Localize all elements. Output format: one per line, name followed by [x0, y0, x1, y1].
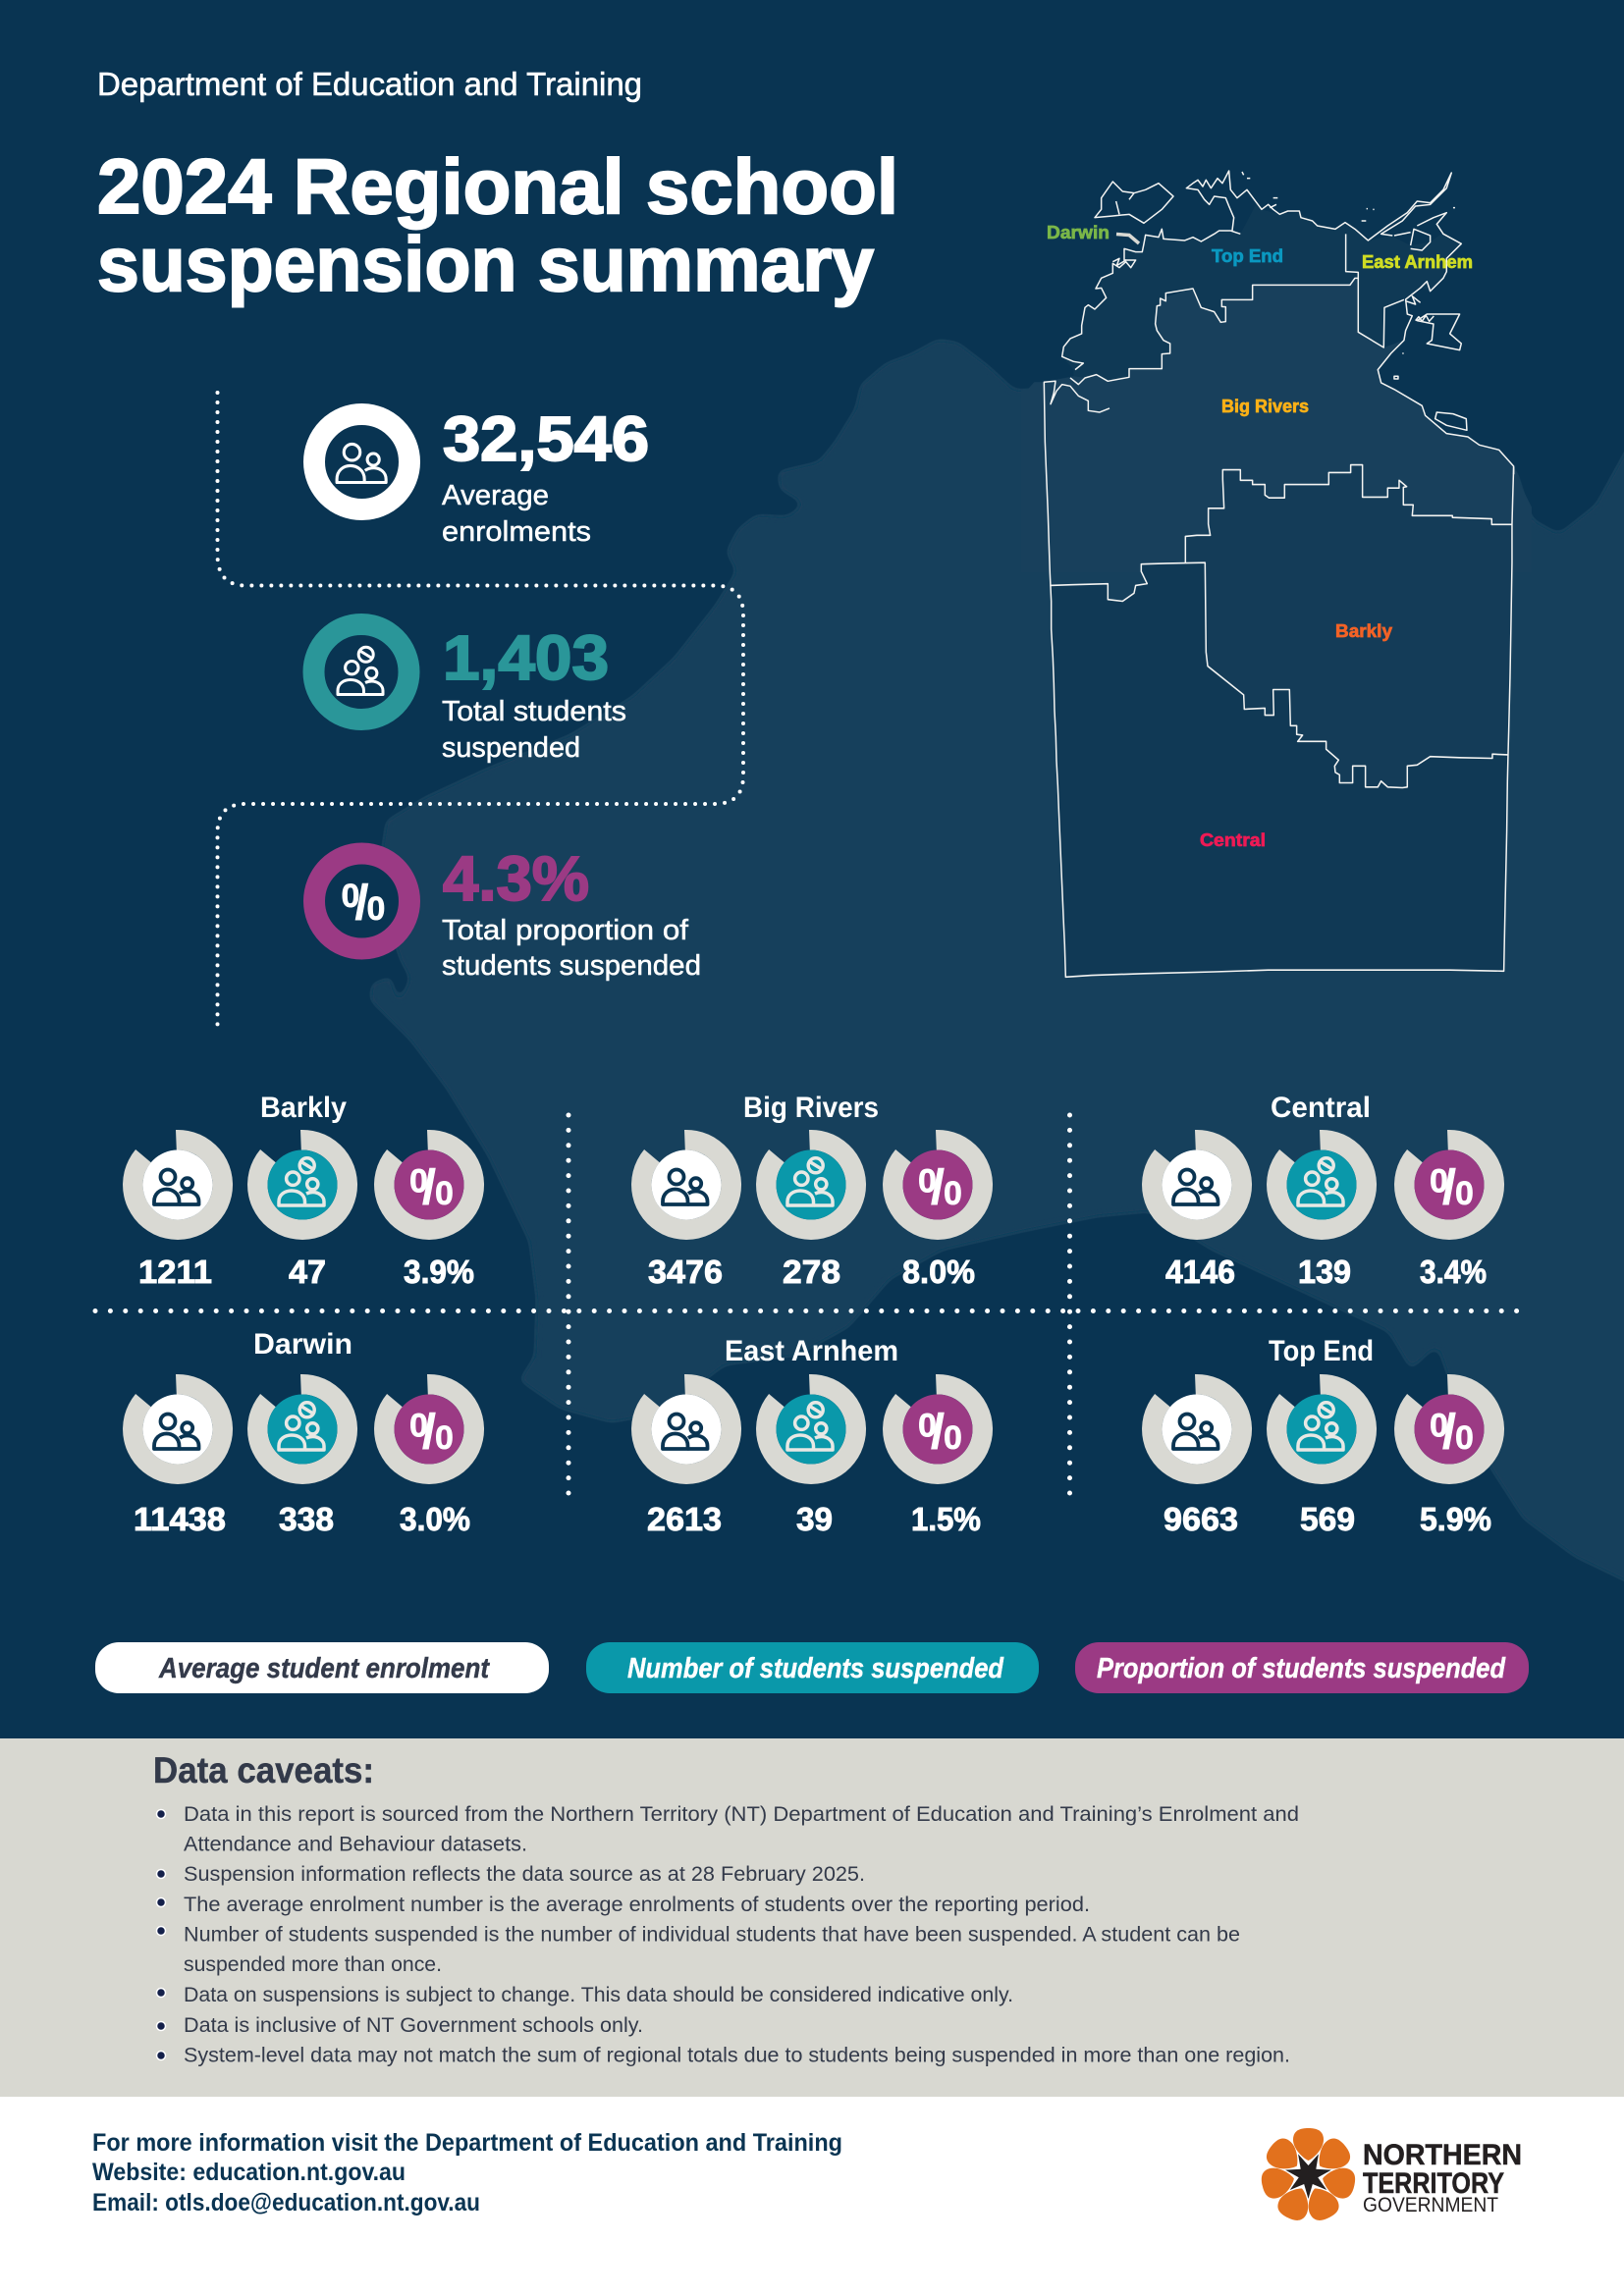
caveat text: Suspension information reflects the data source as at 28 February 2025. — [184, 1863, 865, 1886]
caveat text: The average enrolment number is the average enrolments of students over the reporting period. — [184, 1894, 1090, 1916]
caveat text: suspended more than once. — [184, 1953, 442, 1976]
donut: proportion: 0 — [409, 1162, 428, 1200]
value: 1,403 — [443, 622, 609, 693]
region title: Darwin — [253, 1328, 352, 1361]
donut: proportion: / — [931, 1160, 945, 1215]
donut: enrolment — [123, 1130, 233, 1240]
icon: ring with people — [314, 414, 409, 509]
KPI: total proportion suspended: students suspended — [442, 950, 701, 982]
label: Total proportion of — [442, 915, 689, 946]
panel: Top End — [1142, 1335, 1504, 1537]
donut: proportion: / — [422, 1160, 436, 1215]
donut: proportion: 0 — [409, 1408, 428, 1445]
icon: ring with suspended people — [314, 624, 408, 720]
map region: Central — [1050, 562, 1508, 977]
KPI: average enrolments: enrolments — [442, 516, 591, 548]
donut: proportion — [1394, 1374, 1504, 1484]
panel: Top End: 569 — [1300, 1501, 1355, 1537]
panel: Barkly: 47 — [289, 1254, 326, 1290]
donut: proportion — [1394, 1130, 1504, 1240]
caveat text: System-level data may not match the sum of regional totals due to students being suspended in more than one region. — [184, 2044, 1290, 2067]
donut: suspended — [1267, 1374, 1377, 1484]
map label: Top End: Top End — [1212, 246, 1283, 266]
caveat text: Attendance and Behaviour datasets. — [184, 1834, 527, 1855]
donut: enrolment — [123, 1374, 233, 1484]
donut: proportion: 0 — [1455, 1175, 1474, 1212]
donut: suspended — [756, 1374, 866, 1484]
donut: suspended — [247, 1130, 357, 1240]
icon: ring with percent: / — [355, 876, 369, 931]
logo wordmark: GOVERNMENT — [1363, 2194, 1498, 2216]
donut: proportion: 0 — [918, 1408, 937, 1445]
region title: Barkly — [260, 1092, 347, 1124]
map outlines: northern coast and borders — [1044, 171, 1514, 474]
map label: East Arnhem: East Arnhem — [1362, 252, 1473, 272]
panel: Big Rivers: 8.0% — [902, 1254, 975, 1290]
footer contact text: Website: education.nt.gov.au — [92, 2159, 406, 2186]
donut: enrolment — [631, 1374, 741, 1484]
legend pill: proportion: Proportion of students suspended — [1097, 1653, 1506, 1684]
map region: Top End — [1062, 203, 1358, 381]
panel: Central: 3.4% — [1420, 1254, 1487, 1290]
icon: desert rose flower — [1259, 2128, 1358, 2224]
panel: Central: 139 — [1298, 1254, 1351, 1290]
donut: proportion: 0 — [918, 1162, 937, 1200]
region title: Top End — [1269, 1335, 1374, 1367]
region title: Big Rivers — [743, 1092, 879, 1124]
map label: Central: Central — [1200, 830, 1266, 850]
caveats heading: Data caveats: — [153, 1750, 374, 1790]
values: 11438 — [134, 1501, 226, 1537]
donut: proportion: 0 — [1430, 1408, 1448, 1445]
footer contact text — [92, 2129, 842, 2216]
logo wordmark — [1363, 2139, 1522, 2216]
donut: enrolment — [631, 1130, 741, 1240]
KPI: total students suspended: suspended — [442, 732, 580, 764]
donut: proportion: 0 — [1455, 1419, 1474, 1457]
donut: suspended — [247, 1374, 357, 1484]
donut: suspended — [1267, 1130, 1377, 1240]
panel: Big Rivers: 278 — [783, 1254, 840, 1290]
value: 32,546 — [443, 403, 649, 474]
donut: proportion — [883, 1130, 993, 1240]
legend pill: suspended — [586, 1642, 1039, 1693]
donut: proportion — [883, 1374, 993, 1484]
donut: proportion: 0 — [435, 1419, 454, 1457]
title: 2024 Regional school — [97, 142, 898, 230]
KPI: total students suspended — [314, 622, 626, 764]
map region: Barkly — [1185, 465, 1512, 787]
panel: Darwin: 3.0% — [400, 1501, 470, 1537]
region title: Central — [1271, 1092, 1371, 1124]
donut: proportion — [374, 1374, 484, 1484]
donut: proportion — [374, 1130, 484, 1240]
icon: ring with percent: 0 — [342, 878, 359, 915]
icon: ring with percent: 0 — [367, 890, 385, 928]
panel: East Arnhem — [631, 1335, 993, 1537]
background: navy page — [0, 0, 1624, 1739]
legend pill: enrolment: Average student enrolment — [158, 1653, 490, 1684]
donut: proportion: 0 — [435, 1175, 454, 1212]
map label: Big Rivers: Big Rivers — [1221, 397, 1309, 416]
map label: Darwin: Darwin — [1047, 223, 1110, 242]
donut: proportion: 0 — [944, 1419, 962, 1457]
donut: proportion: / — [931, 1404, 945, 1459]
legend — [95, 1642, 1529, 1693]
values: 1211 — [138, 1254, 212, 1290]
panel: Central — [1142, 1092, 1504, 1290]
map: Northern Territory regions — [1044, 171, 1514, 977]
panel: Darwin — [123, 1328, 484, 1537]
logo wordmark: TERRITORY — [1363, 2167, 1504, 2200]
title — [97, 142, 898, 307]
map outlines: inland borders — [1045, 442, 1514, 977]
logo: Northern Territory Government — [1259, 2128, 1522, 2224]
caveat text: Data in this report is sourced from the Northern Territory (NT) Department of Education and Training’s Enrolment and — [184, 1803, 1299, 1826]
donut: proportion: / — [1442, 1160, 1456, 1215]
value: 4.3% — [443, 843, 589, 914]
legend pill: suspended: Number of students suspended — [627, 1653, 1004, 1684]
donut: enrolment — [1142, 1130, 1252, 1240]
caveat text: Data is inclusive of NT Government schools only. — [184, 2014, 643, 2037]
department name: Department of Education and Training — [97, 66, 642, 102]
KPI: average enrolments — [314, 403, 649, 548]
footer contact text: For more information visit the Department of Education and Training — [92, 2129, 842, 2157]
map region: East Arnhem — [1345, 223, 1461, 347]
donut: enrolment — [1142, 1374, 1252, 1484]
values: 2613 — [647, 1501, 722, 1537]
donut: proportion: / — [422, 1404, 436, 1459]
panel: East Arnhem: 1.5% — [911, 1501, 981, 1537]
icon: ring with percent — [314, 854, 409, 948]
legend pill: proportion — [1075, 1642, 1529, 1693]
panel: Darwin: 338 — [279, 1501, 334, 1537]
grid dividers — [95, 1115, 1532, 1508]
legend pill: enrolment — [95, 1642, 549, 1693]
values: 4146 — [1165, 1254, 1235, 1290]
footer contact text: Email: otls.doe@education.nt.gov.au — [92, 2189, 480, 2216]
dotted connector — [218, 393, 743, 1025]
caveat text: Data on suspensions is subject to change. This data should be considered indicative only. — [184, 1984, 1013, 2006]
donut: suspended — [756, 1130, 866, 1240]
background: Australia silhouette — [369, 262, 1624, 1615]
donut: proportion: / — [1442, 1404, 1456, 1459]
caveat bullets — [157, 1810, 165, 2059]
values: 9663 — [1164, 1501, 1238, 1537]
map label pointer: Darwin — [1116, 234, 1139, 243]
region title: East Arnhem — [725, 1335, 898, 1367]
panel: Top End: 5.9% — [1420, 1501, 1491, 1537]
donut: proportion: 0 — [944, 1175, 962, 1212]
panel: East Arnhem: 39 — [796, 1501, 833, 1537]
panel: Barkly — [123, 1092, 484, 1290]
panel: Big Rivers — [631, 1092, 993, 1290]
label: Average — [442, 480, 549, 511]
caveat text — [184, 1803, 1299, 2067]
panel: data caveats — [0, 1738, 1624, 2097]
values: 3476 — [648, 1254, 723, 1290]
label: Total students — [442, 696, 626, 727]
title: suspension summary — [97, 220, 874, 307]
map label: Barkly: Barkly — [1335, 621, 1392, 641]
KPI: total proportion suspended — [314, 843, 701, 982]
logo wordmark: NORTHERN — [1363, 2139, 1522, 2171]
donut: proportion: 0 — [1430, 1162, 1448, 1200]
caveat text: Number of students suspended is the number of individual students that have been suspended. A student can be — [184, 1924, 1240, 1946]
panel: Barkly: 3.9% — [404, 1254, 474, 1290]
